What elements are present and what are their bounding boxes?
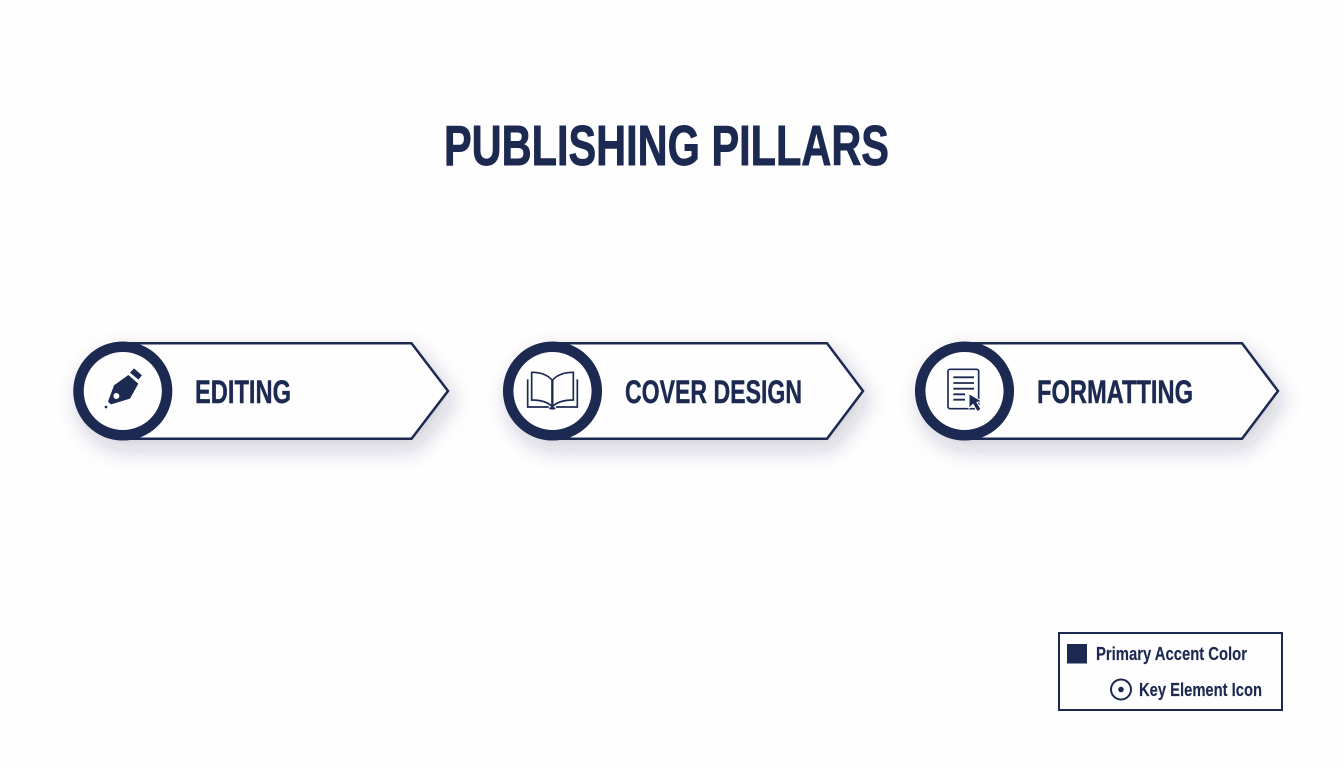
- icon ring: editing: [78, 347, 167, 435]
- legend label: primary accent color: Primary Accent Color: [1096, 644, 1247, 664]
- arrow banner: formatting: [967, 343, 1278, 439]
- arrow banner: cover design: [555, 343, 863, 439]
- legend icon: key element: [1111, 680, 1131, 700]
- title: PUBLISHING PILLARS: [444, 114, 889, 178]
- icon ring: cover design: [508, 347, 597, 435]
- legend box: [1059, 633, 1282, 710]
- arrow banner: editing: [125, 343, 448, 439]
- panel: cover design: [508, 343, 863, 439]
- legend: [1059, 633, 1282, 710]
- label: cover design: COVER DESIGN: [625, 374, 802, 410]
- label: editing: EDITING: [195, 374, 291, 410]
- icon: document with cursor: [948, 369, 982, 412]
- panel: editing: [78, 343, 448, 439]
- label: formatting: FORMATTING: [1037, 374, 1193, 410]
- badge: cover design: [508, 343, 863, 439]
- legend label: key element icon: Key Element Icon: [1139, 680, 1262, 700]
- badge: editing: [78, 343, 448, 439]
- icon: fountain pen: [105, 368, 142, 408]
- icon: open book: [528, 372, 577, 410]
- panel: formatting: [920, 343, 1278, 439]
- badge: formatting: [920, 343, 1278, 439]
- icon ring: formatting: [920, 347, 1009, 435]
- legend swatch: primary accent color: [1067, 644, 1087, 664]
